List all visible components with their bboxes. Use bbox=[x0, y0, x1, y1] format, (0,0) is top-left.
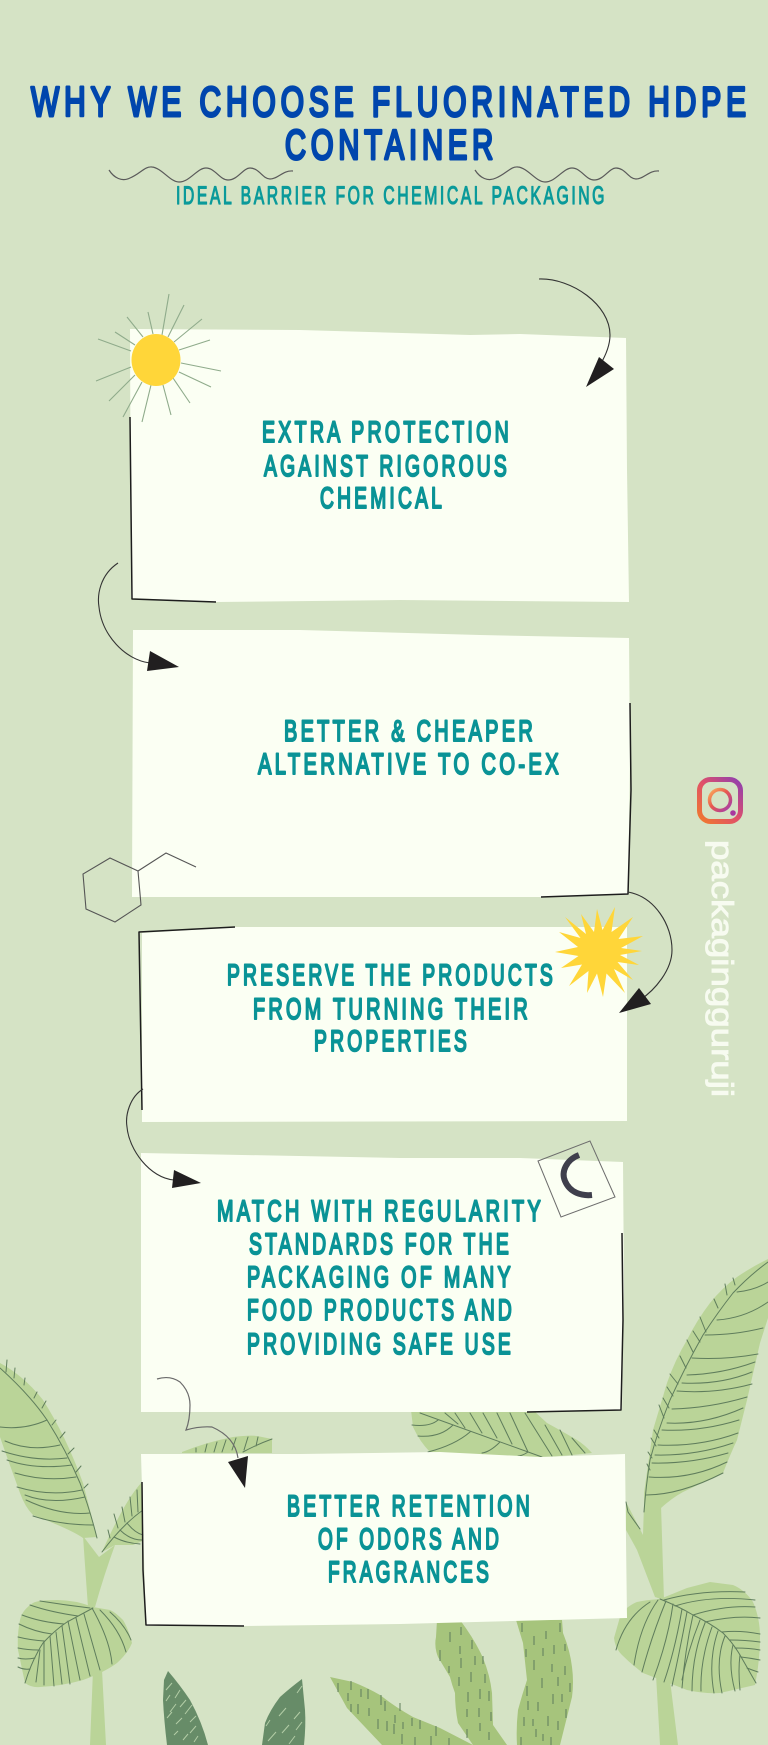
leaf behind card five top left bbox=[182, 1436, 272, 1453]
card 1 text: EXTRA PROTECTION bbox=[262, 416, 512, 449]
panel: card 4 bbox=[141, 1153, 624, 1412]
left plant stem bbox=[83, 1536, 115, 1745]
card 4 text: STANDARDS FOR THE bbox=[249, 1228, 512, 1261]
icon: molecule bbox=[83, 853, 196, 922]
card 1 text bbox=[262, 416, 512, 515]
right plant stem bbox=[626, 1502, 678, 1745]
card 2 text: ALTERNATIVE TO CO-EX bbox=[258, 748, 562, 781]
card 4 text: PROVIDING SAFE USE bbox=[247, 1328, 514, 1361]
arrow: to card 3 bbox=[619, 892, 672, 1013]
card 3 background bbox=[142, 927, 627, 1122]
arrow: to card 5 bbox=[157, 1378, 248, 1488]
card 3 text bbox=[227, 959, 556, 1058]
arrow: to card 2 bbox=[98, 563, 179, 671]
plant: centre leaf between cards bbox=[411, 1410, 592, 1458]
card 1 text: AGAINST RIGOROUS bbox=[264, 450, 510, 483]
dark green leaf left bbox=[163, 1671, 208, 1745]
card 5 text bbox=[287, 1490, 533, 1589]
card 2 text bbox=[258, 715, 562, 781]
card 2 text: BETTER & CHEAPER bbox=[284, 715, 536, 748]
title bbox=[31, 78, 751, 168]
card 1 corner lines bbox=[130, 417, 216, 602]
panel: card 2 bbox=[132, 630, 631, 897]
panel: card 1 bbox=[130, 329, 629, 602]
card 3 text: PROPERTIES bbox=[314, 1025, 470, 1058]
panel: card 5 bbox=[141, 1452, 627, 1626]
card 5 text: OF ODORS AND bbox=[318, 1523, 502, 1556]
decorative wave left bbox=[109, 167, 293, 182]
icon: letter C in tilted square bbox=[538, 1141, 615, 1217]
left large leaf bbox=[0, 1360, 97, 1538]
icon: instagram logo bbox=[700, 780, 740, 822]
card 3 corner lines bbox=[139, 927, 235, 1110]
right large leaf bbox=[644, 1259, 768, 1512]
green leaf sweeping left bbox=[330, 1677, 473, 1745]
card 4 corner lines bbox=[527, 1233, 623, 1412]
arrow: to card 1 bbox=[539, 279, 614, 387]
left lower leaf bbox=[18, 1600, 132, 1687]
panel: card 3 bbox=[139, 927, 627, 1122]
card 4 background bbox=[141, 1153, 624, 1412]
right lower leaf bbox=[614, 1582, 760, 1693]
decorative wave right bbox=[475, 167, 659, 182]
card 4 text: FOOD PRODUCTS AND bbox=[247, 1294, 515, 1327]
green leaf right bbox=[516, 1620, 573, 1745]
plant: left foliage bbox=[0, 1360, 272, 1745]
icon: starburst bbox=[555, 907, 643, 997]
title: CONTAINER bbox=[285, 121, 498, 168]
card 2 background bbox=[132, 630, 630, 897]
instagram handle: packagingguruji bbox=[705, 840, 740, 1097]
dark green leaf right bbox=[262, 1679, 305, 1745]
card 5 text: BETTER RETENTION bbox=[287, 1490, 533, 1523]
card 5 corner lines bbox=[142, 1482, 244, 1626]
arrow: to card 4 bbox=[127, 1089, 201, 1188]
icon: sun with rays bbox=[96, 294, 221, 422]
left small side leaf bbox=[102, 1482, 145, 1552]
card 3 text: FROM TURNING THEIR bbox=[253, 993, 531, 1026]
card 4 text bbox=[217, 1195, 544, 1361]
card 4 text: PACKAGING OF MANY bbox=[247, 1261, 514, 1294]
card 3 text: PRESERVE THE PRODUCTS bbox=[227, 959, 556, 992]
card 2 corner lines bbox=[541, 703, 631, 897]
plant: right foliage bbox=[614, 1259, 768, 1745]
green leaf centre bbox=[435, 1620, 507, 1745]
card 5 text: FRAGRANCES bbox=[328, 1556, 492, 1589]
card 4 text: MATCH WITH REGULARITY bbox=[217, 1195, 544, 1228]
card 5 background bbox=[141, 1452, 627, 1626]
card 1 background bbox=[130, 329, 629, 602]
card 1 text: CHEMICAL bbox=[320, 482, 445, 515]
plant: bottom leaves bbox=[163, 1620, 573, 1745]
